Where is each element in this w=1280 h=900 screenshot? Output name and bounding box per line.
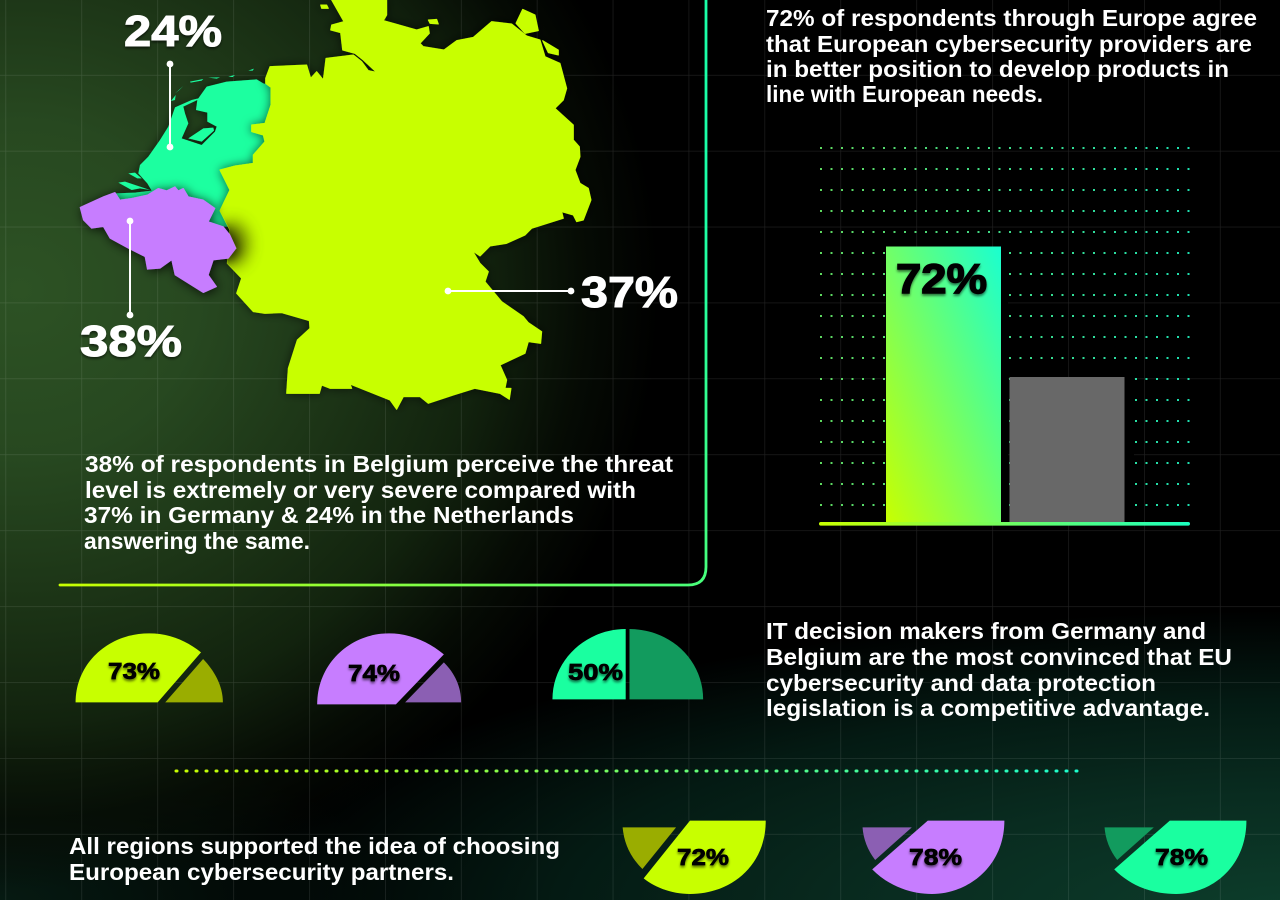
text block: threat perception: 37% in Germany & 24% in the Netherlands xyxy=(84,502,574,528)
map region: Netherlands xyxy=(115,69,293,227)
gauge: 78% purple: 78% xyxy=(909,844,962,870)
text block: European providers: line with European needs. xyxy=(766,81,1043,107)
bar: remainder grey xyxy=(1010,372,1134,523)
map region: Germany xyxy=(220,0,591,409)
text block: European partners: European cybersecurity partners. xyxy=(69,859,454,885)
text block: threat perception: answering the same. xyxy=(84,528,310,554)
text block: European providers xyxy=(766,5,1257,107)
text block: legislation advantage: cybersecurity and data protection xyxy=(766,670,1156,696)
gauge: 78% mint: 78% xyxy=(1155,844,1208,870)
callout: Belgium 38% xyxy=(80,218,182,366)
gauge: 50% mint xyxy=(552,629,703,699)
gauge: 78% mint xyxy=(1105,821,1246,894)
text block: legislation advantage: IT decision makers from Germany and xyxy=(766,618,1206,644)
gauge: 73% lime xyxy=(76,633,223,702)
gauge: 50% mint: 50% xyxy=(568,659,623,685)
callout: Belgium 38%: 38% xyxy=(80,317,182,366)
map region: Belgium xyxy=(80,187,236,293)
map: Netherlands, Germany and Belgium xyxy=(80,0,591,409)
text block: European providers: in better position to develop products in xyxy=(766,56,1229,82)
text block: European partners: All regions supported the idea of choosing xyxy=(69,833,560,859)
gauge: 78% purple xyxy=(863,821,1004,894)
callout: Netherlands 24%: 24% xyxy=(124,7,222,56)
callout: Germany 37%: 37% xyxy=(581,268,678,317)
text block: threat perception: 38% of respondents in Belgium perceive the threat xyxy=(85,451,673,477)
callout: Germany 37% xyxy=(445,268,678,317)
gauge: 73% lime: 73% xyxy=(108,658,160,684)
text block: legislation advantage xyxy=(766,618,1232,721)
text block: legislation advantage: legislation is a competitive advantage. xyxy=(766,695,1210,721)
panel frame: map section border xyxy=(60,0,706,585)
text block: threat perception xyxy=(84,451,673,554)
callout: Netherlands 24% xyxy=(124,7,222,150)
gauge: 72% lime: 72% xyxy=(677,844,729,870)
text block: European providers: that European cybersecurity providers are xyxy=(766,31,1252,57)
text block: legislation advantage: Belgium are the most convinced that EU xyxy=(766,644,1232,670)
bar chart: 72% agree xyxy=(819,148,1190,526)
text block: threat perception: level is extremely or very severe compared with xyxy=(85,477,636,503)
bar: 72% highlighted xyxy=(886,240,1008,523)
text block: European providers: 72% of respondents through Europe agree xyxy=(766,5,1257,31)
text block: European partners xyxy=(69,833,560,885)
gauge: 72% lime xyxy=(623,821,766,894)
bar: 72% highlighted: 72% xyxy=(896,255,987,302)
gauge: 74% purple: 74% xyxy=(348,660,400,686)
chart baseline xyxy=(819,522,1190,526)
gauge: 74% purple xyxy=(317,633,461,704)
